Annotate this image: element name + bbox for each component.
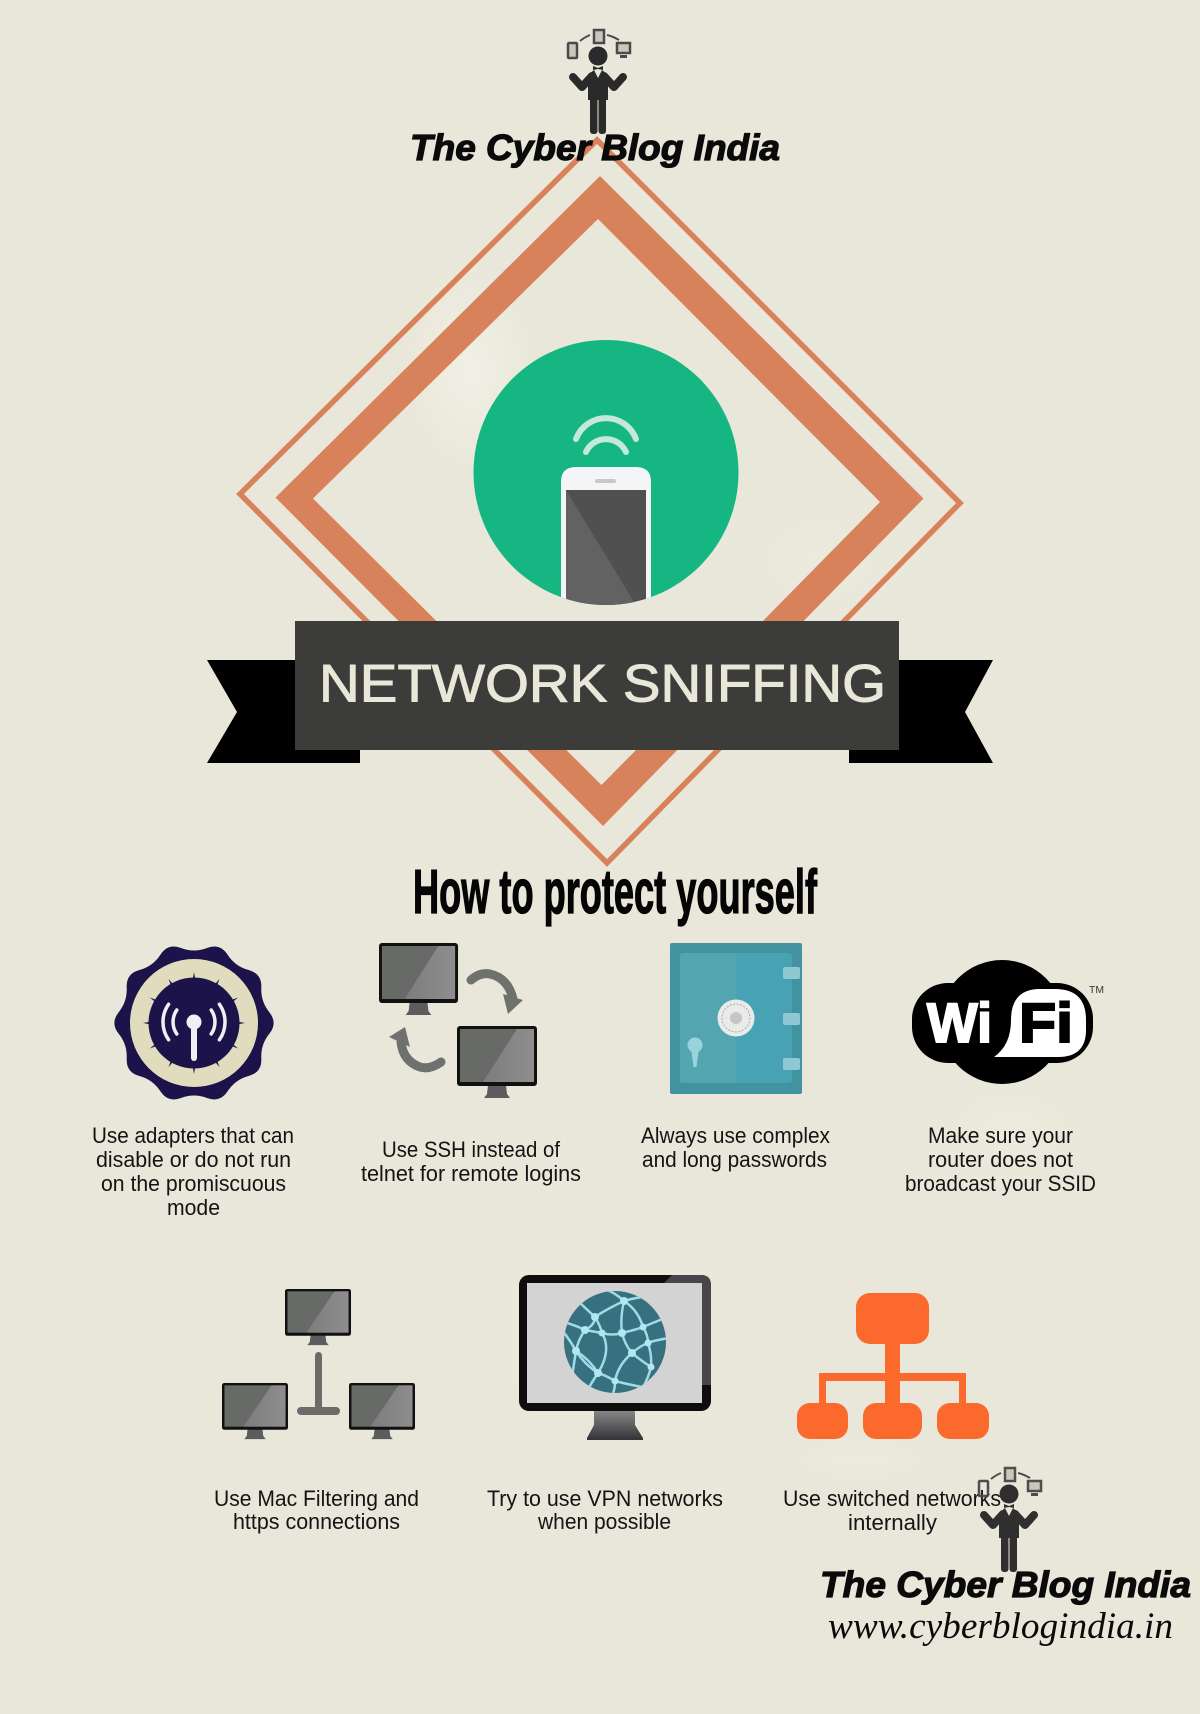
item: adapters — [92, 947, 294, 1220]
title: NETWORK SNIFFING — [319, 654, 886, 714]
icon: monitor with globe — [519, 1275, 711, 1440]
icon: two monitors with arrows — [379, 943, 537, 1098]
title ribbon — [207, 621, 993, 763]
phone — [561, 467, 651, 620]
caption — [92, 1123, 294, 1220]
caption: disable or do not run — [96, 1147, 291, 1172]
caption: router does not — [928, 1147, 1073, 1172]
bottom logo — [820, 1468, 1191, 1647]
caption — [783, 1486, 1001, 1535]
item: passwords — [641, 943, 830, 1172]
top logo — [410, 30, 780, 168]
website url: www.cyberblogindia.in — [828, 1606, 1173, 1647]
icon: wifi logo — [912, 960, 1104, 1084]
caption: mode — [167, 1195, 220, 1220]
logo text: The Cyber Blog India — [410, 127, 780, 168]
caption: Always use complex — [641, 1123, 830, 1148]
icon: wifi logo: Wi — [927, 991, 992, 1054]
diamond frame — [240, 140, 960, 863]
outer thin diamond — [240, 140, 960, 863]
icon: wifi logo: Fi — [1019, 991, 1073, 1054]
caption — [214, 1486, 419, 1534]
caption: internally — [848, 1510, 937, 1535]
item: Mac filtering — [214, 1289, 419, 1534]
caption — [361, 1137, 581, 1186]
caption: and long passwords — [642, 1147, 827, 1172]
icon: green circle with phone — [474, 340, 738, 620]
icon: orange hierarchy — [797, 1293, 989, 1439]
banner panel — [295, 621, 899, 750]
icon: juggling man — [568, 30, 630, 134]
caption: Use SSH instead of — [382, 1137, 561, 1162]
caption: Try to use VPN networks — [487, 1486, 723, 1511]
caption: on the promiscuous — [101, 1171, 286, 1196]
caption: Use adapters that can — [92, 1123, 294, 1148]
wifi signal arcs — [576, 418, 636, 452]
caption — [905, 1123, 1096, 1196]
item: SSID — [905, 960, 1104, 1196]
icon: three networked monitors — [222, 1289, 415, 1439]
caption: Make sure your — [928, 1123, 1073, 1148]
item: SSH — [361, 943, 581, 1186]
item: VPN — [487, 1275, 723, 1534]
inner thick diamond — [276, 176, 924, 826]
logo text: The Cyber Blog India — [820, 1564, 1191, 1605]
icon: safe — [670, 943, 802, 1094]
caption: Use switched networks — [783, 1486, 1001, 1511]
icon: antenna badge — [114, 947, 274, 1099]
caption: telnet for remote logins — [361, 1161, 581, 1186]
caption: when possible — [537, 1509, 671, 1534]
caption: https connections — [233, 1509, 400, 1534]
item: switched networks — [783, 1293, 1001, 1535]
caption — [641, 1123, 830, 1172]
caption — [487, 1486, 723, 1534]
heading: How to protect yourself — [413, 858, 817, 927]
ribbon right tail — [849, 660, 993, 763]
icon: juggling man — [979, 1468, 1041, 1572]
ribbon left tail — [207, 660, 360, 763]
icon: wifi logo: TM — [1089, 985, 1104, 996]
caption: broadcast your SSID — [905, 1171, 1096, 1196]
caption: Use Mac Filtering and — [214, 1486, 419, 1511]
